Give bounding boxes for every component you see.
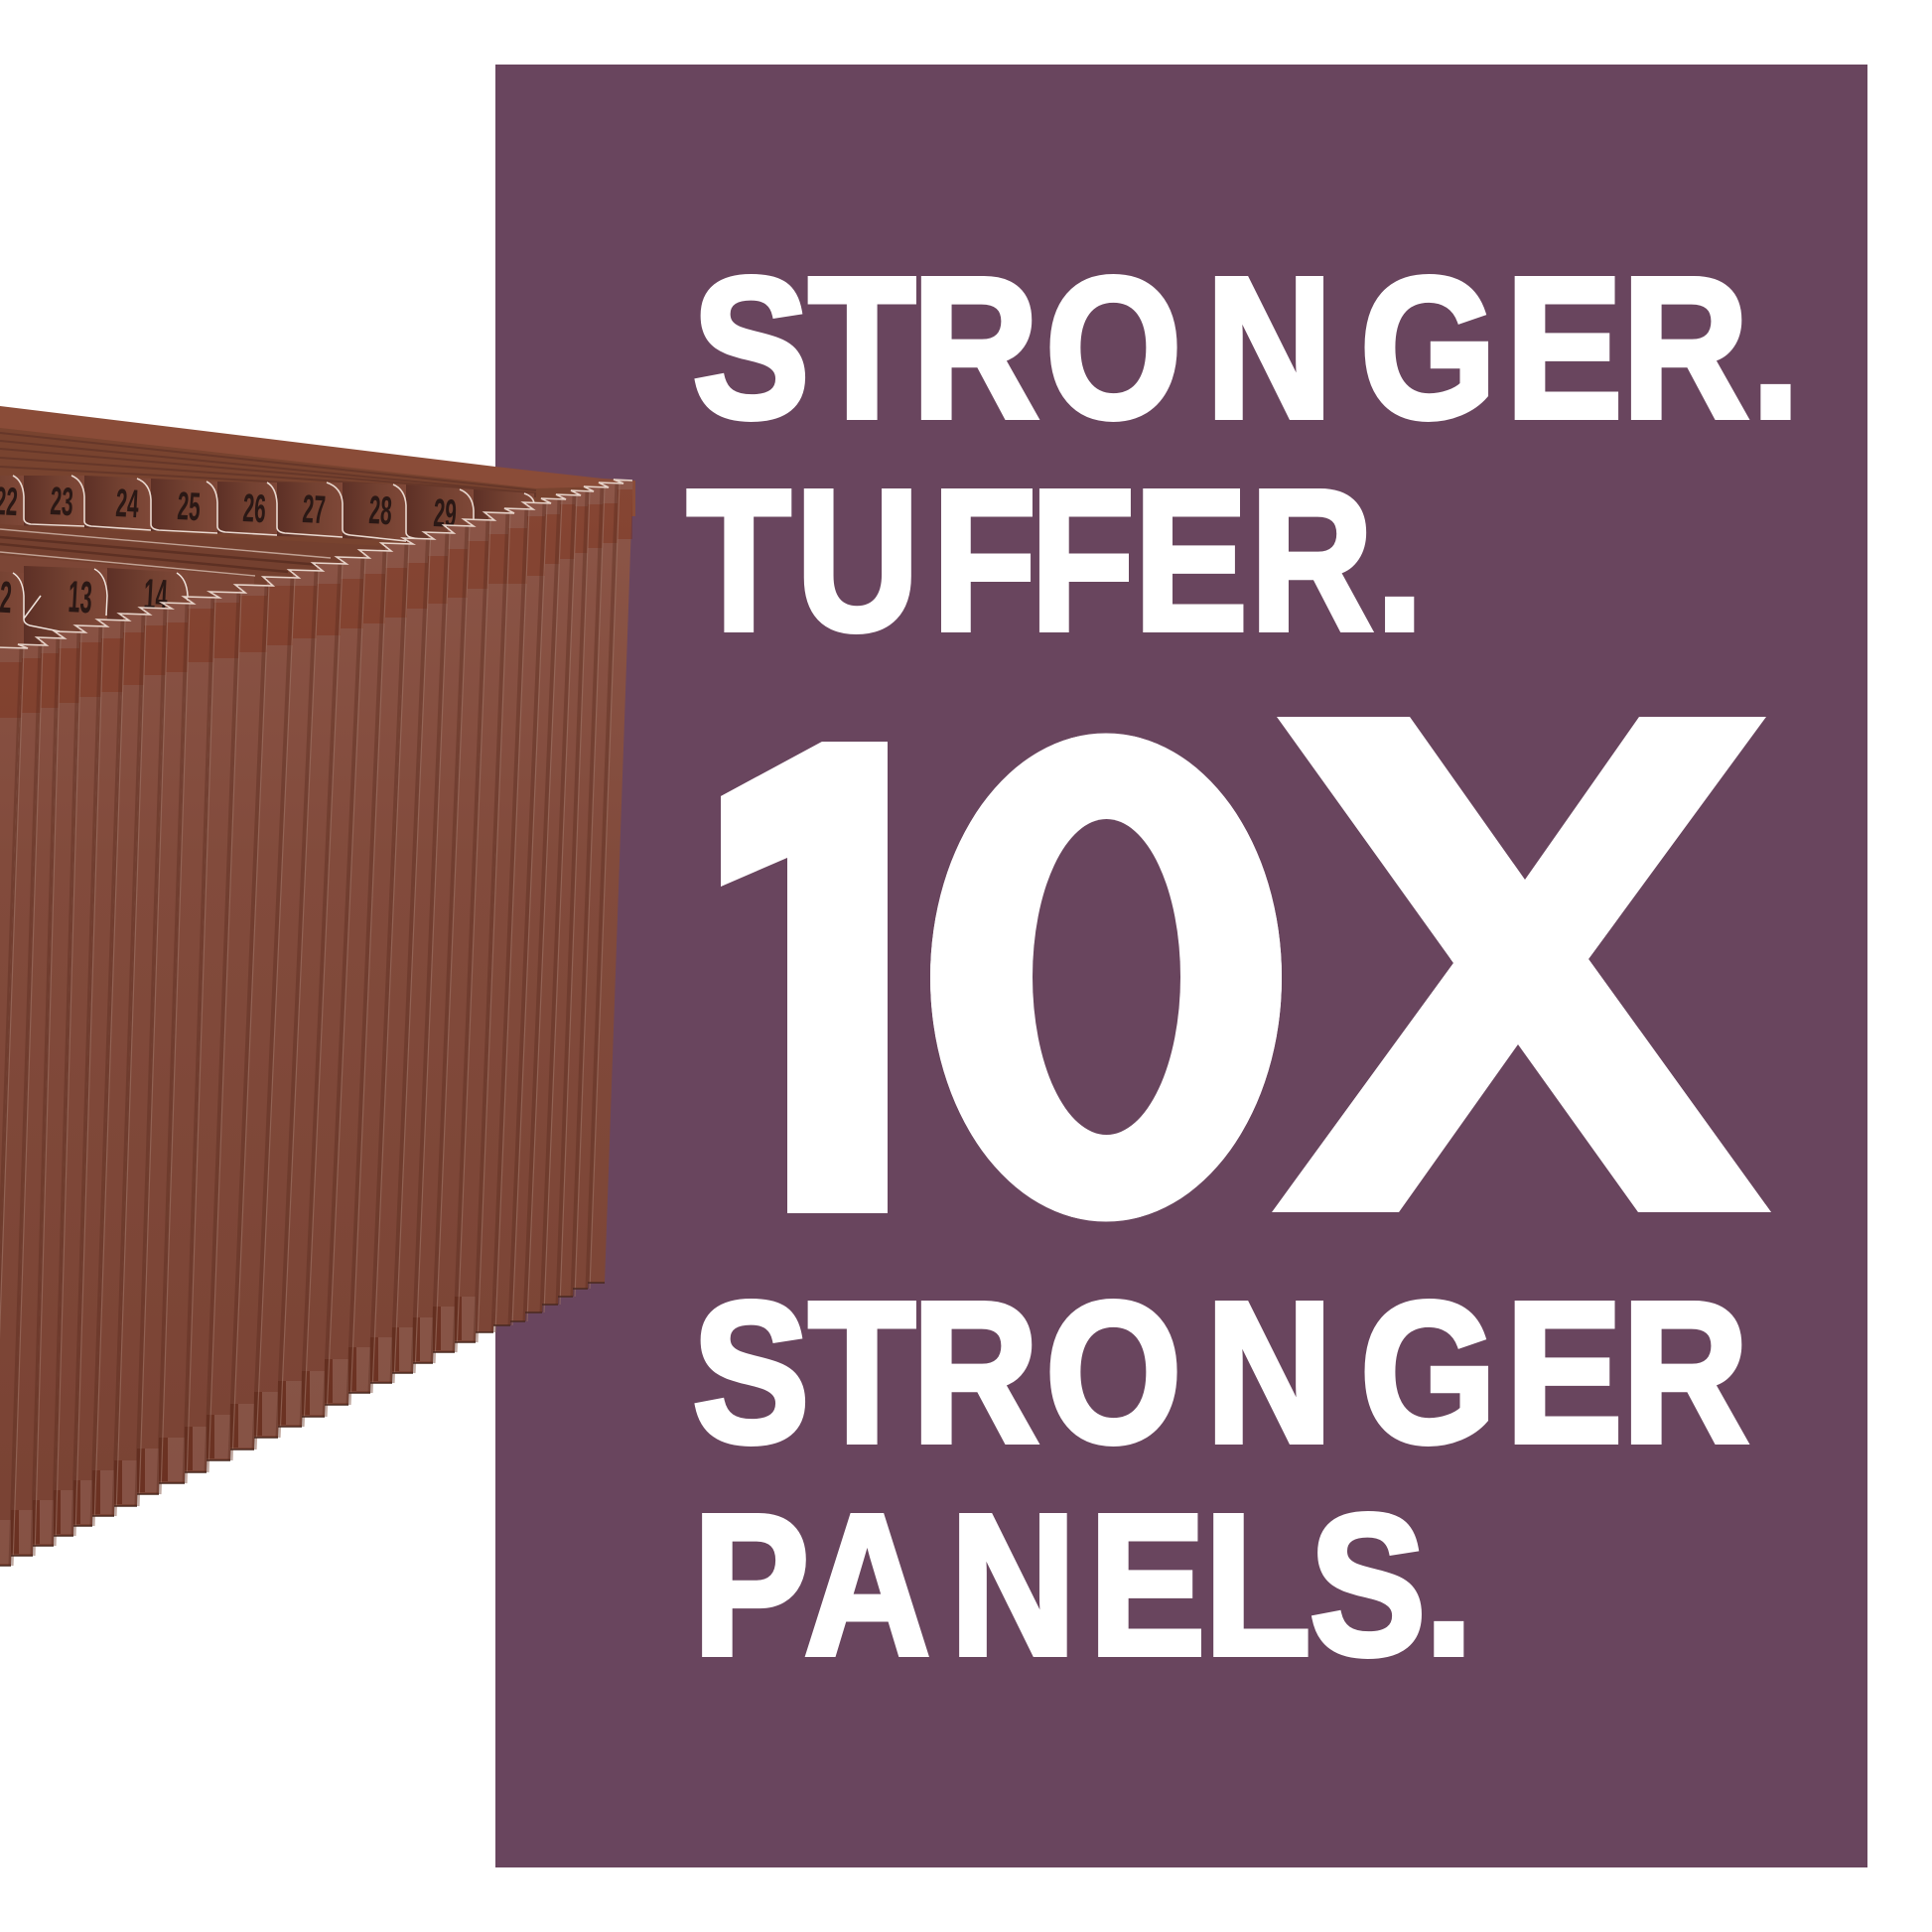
tab numbers: 29	[433, 490, 458, 536]
headline: STRONGER.: STRONGER.	[692, 236, 1800, 461]
middle dividers	[0, 524, 417, 596]
stacked rear dividers	[0, 428, 606, 695]
big number: 10X: 0	[874, 594, 1338, 1359]
tab numbers: 23	[50, 479, 74, 524]
pleat crease highlights	[0, 483, 620, 1577]
panel: purple background	[495, 65, 1867, 1867]
tab numbers: 24	[115, 481, 140, 526]
pleat bottom ledges	[0, 1283, 605, 1566]
pleat crease shadows	[0, 483, 618, 1577]
headline: TUFFER.: TUFFER.	[687, 448, 1424, 672]
pleats	[0, 481, 633, 1577]
tab numbers: 25	[177, 483, 202, 529]
tab edges	[13, 476, 534, 548]
tab numbers: 26	[242, 485, 267, 531]
sub-headline: STRONGER: STRONGER	[692, 1261, 1748, 1485]
lighter patches at pleat bottoms	[0, 1297, 476, 1564]
tab row one	[0, 476, 534, 548]
tab numbers: 28	[368, 487, 393, 533]
product photo: accordion file folder	[0, 406, 635, 1577]
big number: 10X: 1	[631, 594, 1013, 1359]
big number: 10X: X	[1265, 560, 1782, 1367]
sub-headline: PANELS.: PANELS.	[693, 1474, 1473, 1698]
back panel of the folder	[0, 406, 635, 516]
tab numbers: 27	[302, 486, 327, 532]
darker stain band on pleats	[0, 489, 632, 718]
tab numbers row two: 14	[142, 571, 169, 621]
big number: 10X	[721, 717, 1771, 1221]
pleat zigzag top edge	[0, 480, 632, 648]
counter of the zero	[1033, 819, 1180, 1135]
tab numbers row two: 13	[67, 573, 93, 622]
tab numbers	[0, 479, 458, 536]
tab row two	[0, 555, 254, 655]
tab numbers row two	[0, 571, 169, 622]
dark patches at pleat bottoms	[11, 1297, 462, 1554]
